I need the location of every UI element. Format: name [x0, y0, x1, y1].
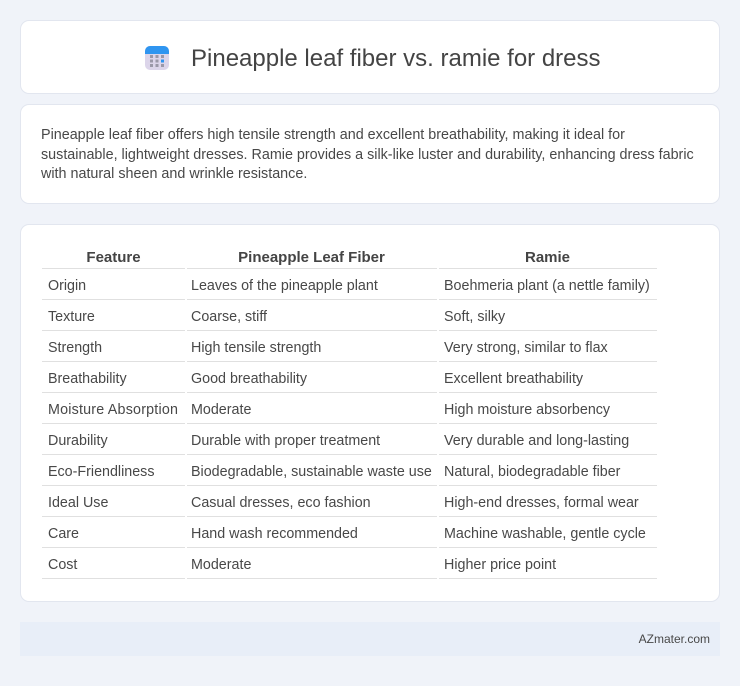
row: ideal use: Ideal Use	[48, 495, 108, 511]
row: eco-friendliness	[48, 464, 620, 480]
row: moisture absorption: Moisture Absorption	[48, 402, 178, 418]
row: texture: Soft, silky	[444, 309, 505, 325]
row: strength: Very strong, similar to flax	[444, 340, 608, 356]
row: durability: Very durable and long-lasting	[444, 433, 629, 449]
footer bar	[20, 622, 720, 656]
summary text: with natural sheen and wrinkle resistance.	[41, 166, 307, 182]
row: cost	[48, 557, 556, 573]
row: strength: High tensile strength	[191, 340, 321, 356]
row: cost: Cost	[48, 557, 77, 573]
row: eco-friendliness: Natural, biodegradable fiber	[444, 464, 620, 480]
row: breathability: Excellent breathability	[444, 371, 583, 387]
row: durability: Durability	[48, 433, 108, 449]
panel: title card	[20, 20, 720, 94]
row: origin: Boehmeria plant (a nettle family)	[444, 278, 650, 294]
table header: Feature	[86, 249, 141, 266]
row: moisture absorption: High moisture absorbency	[444, 402, 610, 418]
row: moisture absorption: Moderate	[191, 402, 251, 418]
row: care	[48, 526, 646, 542]
row: eco-friendliness: Biodegradable, sustainable waste use	[191, 464, 432, 480]
row: care: Machine washable, gentle cycle	[444, 526, 646, 542]
table header: Ramie	[525, 249, 570, 266]
row: care: Hand wash recommended	[191, 526, 358, 542]
footer credit: AZmater.com	[639, 632, 710, 646]
icon: calendar	[145, 46, 169, 70]
summary text: Pineapple leaf fiber offers high tensile strength and excellent breathability, making it ideal for	[41, 127, 625, 143]
row: strength: Strength	[48, 340, 102, 356]
row: breathability: Breathability	[48, 371, 127, 387]
table header: Pineapple Leaf Fiber	[238, 249, 385, 266]
panel: summary card	[20, 104, 720, 204]
row: durability: Durable with proper treatment	[191, 433, 380, 449]
row: texture	[48, 309, 506, 325]
table header	[86, 249, 570, 266]
row: strength	[48, 340, 608, 356]
row: cost: Higher price point	[444, 557, 556, 573]
panel: comparison table	[20, 224, 720, 602]
summary text: sustainable, lightweight dresses. Ramie provides a silk-like luster and durability, enhancing dress fabric	[41, 146, 694, 162]
row: origin	[48, 278, 650, 294]
row: ideal use: High-end dresses, formal wear	[444, 495, 639, 511]
row: cost: Moderate	[191, 557, 251, 573]
title: Pineapple leaf fiber vs. ramie for dress	[191, 45, 601, 72]
row: care: Care	[48, 526, 79, 542]
row: ideal use	[48, 495, 639, 511]
row: origin: Leaves of the pineapple plant	[191, 278, 378, 294]
row: texture: Coarse, stiff	[191, 309, 267, 325]
row: texture: Texture	[48, 309, 95, 325]
row: moisture absorption	[48, 402, 610, 418]
row: breathability: Good breathability	[191, 371, 307, 387]
row: ideal use: Casual dresses, eco fashion	[191, 495, 371, 511]
row: breathability	[48, 371, 583, 387]
row: eco-friendliness: Eco-Friendliness	[48, 464, 154, 480]
row: origin: Origin	[48, 278, 86, 294]
summary text	[41, 127, 694, 182]
row: durability	[48, 433, 629, 449]
